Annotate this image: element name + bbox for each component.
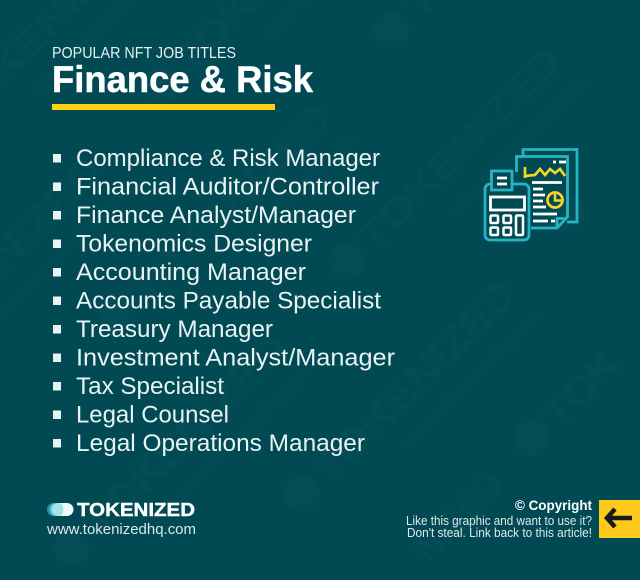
- item: Tax Specialist: Tax Specialist: [76, 373, 224, 400]
- report line chart: [525, 167, 565, 178]
- item: Tokenomics Designer: Tokenomics Designer: [76, 230, 312, 258]
- calculator body: [485, 184, 529, 240]
- wordmark: TOKENIZED: [77, 499, 195, 520]
- eyebrow: popular NFT job titles: POPULAR NFT JOB TITLES: [52, 45, 236, 62]
- title: Finance & Risk: Finance & Risk: [52, 59, 313, 100]
- back arrow button: [599, 500, 640, 538]
- report text lines: [532, 182, 562, 221]
- text: NIZED: [405, 462, 514, 571]
- item: Accounting Manager: Accounting Manager: [76, 259, 306, 286]
- pie chart: [548, 192, 562, 208]
- copyright line 2: Don't steal. Link back to this article!: [407, 526, 592, 540]
- calculator screen: [490, 197, 524, 210]
- brand logo: [46, 499, 196, 538]
- icon: calculator and financial report: [485, 150, 577, 240]
- logo mark: [47, 503, 74, 516]
- item: Treasury Manager: Treasury Manager: [76, 316, 273, 343]
- back page: [523, 150, 577, 222]
- item: Financial Auditor/Controller: Financial Auditor/Controller: [76, 174, 379, 200]
- copyright notice: [406, 498, 592, 540]
- item: Finance Analyst/Manager: Finance Analyst/Manager: [76, 202, 356, 229]
- heading block: [52, 45, 313, 110]
- item: Accounts Payable Specialist: Accounts Payable Specialist: [76, 288, 381, 314]
- icon: left arrow: [607, 509, 632, 527]
- copyright heading: © Copyright: [515, 498, 592, 513]
- report header marks: [553, 161, 566, 163]
- front page: [516, 156, 568, 228]
- receipt: [492, 171, 512, 190]
- item: Legal Counsel: Legal Counsel: [76, 402, 229, 428]
- item: Compliance & Risk Manager: Compliance & Risk Manager: [76, 145, 380, 172]
- text: TOK: [535, 342, 630, 436]
- item: Legal Operations Manager: Legal Operations Manager: [76, 430, 365, 457]
- item: Investment Analyst/Manager: Investment Analyst/Manager: [76, 344, 395, 372]
- title underline: [52, 104, 275, 110]
- job titles list: [53, 145, 395, 457]
- website url: www.tokenizedhq.com: [46, 521, 196, 538]
- calculator keys: [490, 216, 498, 223]
- copyright line 1: Like this graphic and want to use it?: [406, 514, 592, 528]
